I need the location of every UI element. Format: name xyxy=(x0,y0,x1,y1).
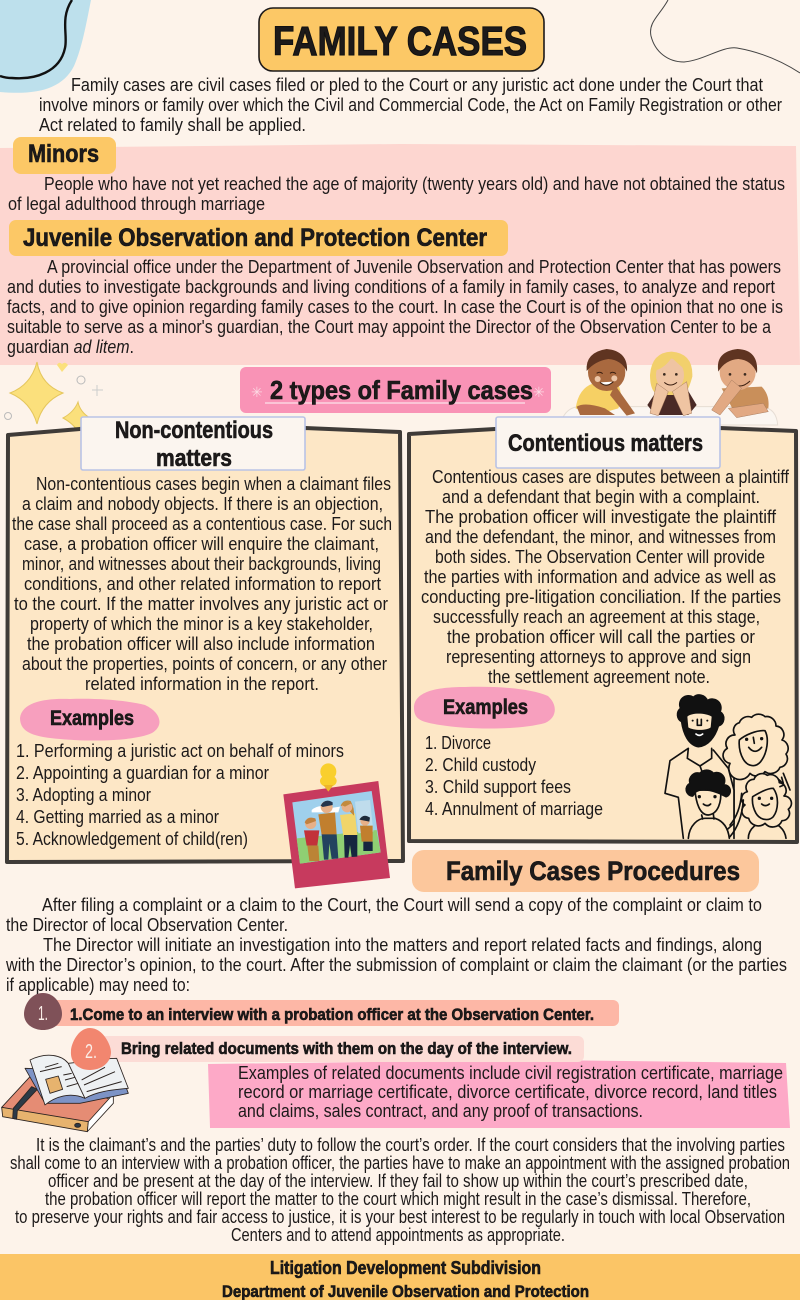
heading: 2 types of Family cases xyxy=(240,367,551,413)
text: non-contentious description xyxy=(12,474,392,694)
text: non-contentious description: property of which the minor is a key stakeholder, xyxy=(30,614,373,634)
text: contentious description: and a defendant that begin with a complaint. xyxy=(442,487,760,507)
child two xyxy=(647,352,697,416)
list: non-contentious examples: 2. Appointing a guardian for a minor xyxy=(16,763,269,783)
text: contentious description: successfully reach an agreement at this stage, xyxy=(433,607,760,627)
step 1: 1. xyxy=(38,1003,48,1025)
label: Non-contentious matters: matters xyxy=(156,445,232,472)
label: Examples: Examples xyxy=(443,696,528,719)
label: Examples xyxy=(414,687,555,729)
heading: Family Cases Procedures: Family Cases Procedures xyxy=(446,856,740,886)
text: non-contentious description: related information in the report. xyxy=(85,674,319,694)
list: contentious examples: 3. Child support fees xyxy=(425,777,571,797)
people in the photo xyxy=(304,801,373,861)
text: procedures introduction xyxy=(5,895,787,995)
child three xyxy=(712,349,769,418)
decoration: blue corner blob xyxy=(0,0,91,93)
text: procedures introduction: the Director of local Observation Center. xyxy=(6,915,288,935)
list: non-contentious examples xyxy=(16,741,344,849)
number badge: 2: 2. xyxy=(85,1041,97,1063)
footer: Litigation Development Subdivision xyxy=(270,1258,541,1278)
child one xyxy=(576,349,635,416)
list: non-contentious examples: 3. Adopting a minor xyxy=(16,785,151,805)
heading: 2 types of Family cases: 2 types of Family cases xyxy=(270,375,533,405)
panel: related documents xyxy=(208,1060,790,1128)
girl xyxy=(742,774,791,838)
intro text: Act related to family shall be applied. xyxy=(39,115,306,135)
father xyxy=(665,695,734,838)
text: non-contentious description: Non-contentious cases begin when a claimant files xyxy=(36,474,391,494)
label: Examples xyxy=(20,699,159,741)
text: non-contentious description: minor, and witnesses about their backgrounds, living xyxy=(22,554,381,574)
list: contentious examples: 2. Child custody xyxy=(425,755,536,775)
text: center definition: guardian ad litem. xyxy=(7,337,134,357)
step 1 xyxy=(24,993,619,1030)
footer xyxy=(0,1254,800,1300)
text: claimant duty paragraph xyxy=(10,1135,790,1245)
text: non-contentious description: to the court. If the matter involves any juristic act or xyxy=(14,594,388,614)
heading: 2 types of Family cases: ✳ xyxy=(251,384,263,400)
number badge: 2 xyxy=(71,1028,111,1070)
illustration: family line drawing xyxy=(665,695,791,838)
text: non-contentious description: the case shall proceed as a contentious case. For such xyxy=(12,514,392,534)
step 2 xyxy=(100,1036,584,1062)
panel: non-contentious matters xyxy=(7,417,403,862)
text: non-contentious description: case, a probation officer will enquire the claimant, xyxy=(24,534,379,554)
title: FAMILY CASES xyxy=(273,18,527,64)
text: non-contentious description: a claim and nobody objects. If there is an objection, xyxy=(22,494,383,514)
text: non-contentious description: about the properties, points of concern, or any other xyxy=(22,654,387,674)
open book xyxy=(25,1062,128,1103)
list: non-contentious examples: 4. Getting married as a minor xyxy=(16,807,219,827)
illustration: three children xyxy=(563,349,778,425)
list: non-contentious examples: 1. Performing a juristic act on behalf of minors xyxy=(16,741,344,761)
heading: 2 types of Family cases: ✳ xyxy=(533,384,545,400)
text: contentious description: The probation officer will investigate the plaintiff xyxy=(425,507,777,527)
panel: contentious matters xyxy=(409,417,797,842)
panel: related documents: and claims, sales contract, and any proof of transactions. xyxy=(238,1101,643,1121)
text: center definition xyxy=(7,257,783,357)
step 2: Bring related documents with them on the day of the interview. xyxy=(121,1039,572,1058)
heading: Family Cases Procedures xyxy=(412,850,759,892)
list: contentious examples: 4. Annulment of marriage xyxy=(425,799,603,819)
panel: definitions xyxy=(0,144,800,365)
heading: Minors xyxy=(13,137,116,174)
text: procedures introduction: if applicable) may need to: xyxy=(6,975,190,995)
mother xyxy=(723,714,790,838)
text: claimant duty paragraph: Centers and to attend appointments as appropriate. xyxy=(231,1225,565,1245)
text: non-contentious description: the probation officer will also include information xyxy=(27,634,375,654)
label: Examples: Examples xyxy=(50,707,134,730)
text: minors definition: of legal adulthood through marriage xyxy=(8,194,265,214)
illustration: books xyxy=(2,1055,128,1132)
text: non-contentious description: conditions, and other related information to report xyxy=(24,574,381,594)
label: Non-contentious matters: Non-contentious xyxy=(115,417,273,444)
heading: Juvenile Observation and Protection Center: Juvenile Observation and Protection Center xyxy=(23,224,487,252)
intro text xyxy=(39,75,782,135)
heading: Minors: Minors xyxy=(28,140,99,168)
decoration: yellow sparkles xyxy=(4,362,103,432)
text: contentious description: representing attorneys to approve and sign xyxy=(446,647,751,667)
text: minors definition xyxy=(8,174,785,214)
boy xyxy=(686,770,730,838)
icon: yellow pin xyxy=(320,763,337,792)
list: non-contentious examples: 5. Acknowledgement of child(ren) xyxy=(16,829,248,849)
list: contentious examples: 1. Divorce xyxy=(425,733,491,753)
label: Contentious matters: Contentious matters xyxy=(508,430,703,457)
decoration: thin curved line top right xyxy=(651,0,800,73)
text: contentious description: the probation officer will call the parties or xyxy=(447,627,755,647)
list: contentious examples xyxy=(425,733,603,819)
step 1: 1.Come to an interview with a probation officer at the Observation Center. xyxy=(70,1005,594,1024)
illustration: pinned family photo xyxy=(283,763,390,888)
label: Contentious matters xyxy=(496,417,720,468)
text: contentious description xyxy=(421,467,790,687)
title xyxy=(259,8,544,71)
label: Non-contentious matters xyxy=(81,417,305,472)
text: contentious description: the settlement agreement note. xyxy=(488,667,710,687)
